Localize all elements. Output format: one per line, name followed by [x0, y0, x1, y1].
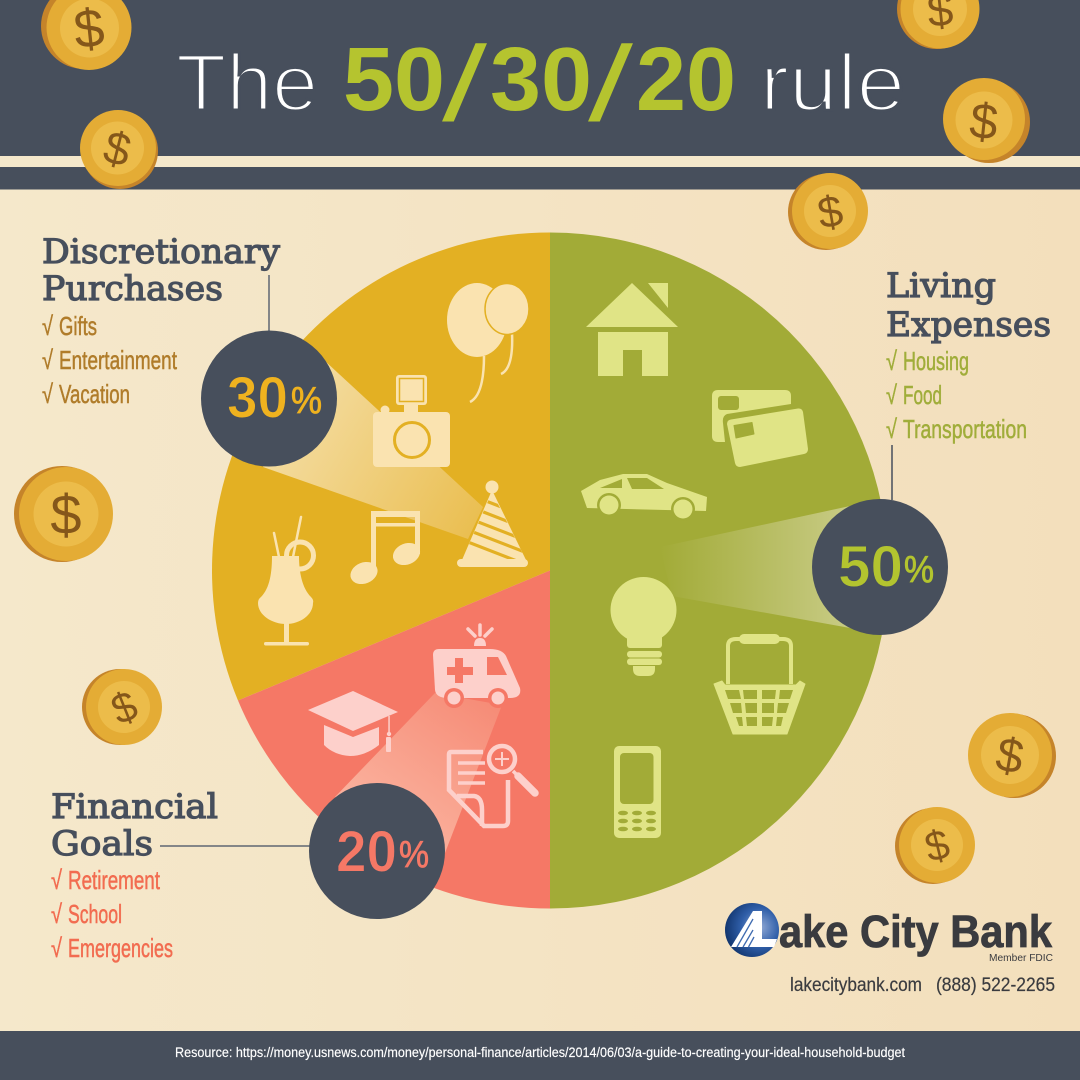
- callout: 20%: %: [399, 834, 429, 876]
- label: living expenses: Expenses: [886, 305, 1051, 345]
- label: financial goals: [51, 787, 218, 963]
- callout: 50%: 50: [838, 534, 903, 600]
- coin 8: $: [992, 728, 1027, 785]
- coin 4: $: [967, 92, 1001, 151]
- callout: 20%: [160, 783, 445, 919]
- label: living expenses: Transportation: [903, 414, 1027, 444]
- coin 8: [968, 713, 1056, 798]
- label: discretionary purchases: Purchases: [42, 269, 223, 309]
- icon: graduation cap: [308, 691, 398, 756]
- label: financial goals: Emergencies: [68, 933, 173, 963]
- coin 3: [897, 0, 980, 49]
- label: living expenses: [886, 266, 1051, 444]
- coin 7: $: [105, 681, 144, 734]
- icon: music notes: [347, 511, 423, 588]
- icon: ambulance: [433, 625, 520, 708]
- title: The: [176, 38, 318, 127]
- title: /: [587, 23, 634, 144]
- footer source text: Resource: https://money.usnews.com/money/personal-finance/articles/2014/06/03/a-guide-to-creating-your-ideal-household-budget: [175, 1045, 905, 1060]
- icon: credit cards: [712, 390, 808, 467]
- label: living expenses: √: [886, 346, 898, 376]
- icon: document with magnifier: [449, 746, 535, 826]
- footer bar: [0, 1031, 1080, 1080]
- coin 1: [41, 0, 132, 70]
- title: [176, 23, 905, 144]
- label: living expenses: Food: [903, 380, 942, 410]
- label: discretionary purchases: Vacation: [59, 379, 130, 409]
- label: discretionary purchases: √: [42, 345, 54, 375]
- coin 9: $: [920, 820, 954, 871]
- label: financial goals: √: [51, 899, 63, 929]
- coin 4: [943, 78, 1030, 163]
- title: 20: [636, 30, 736, 130]
- label: living expenses: Living: [886, 266, 996, 306]
- spotlight 20: [335, 693, 502, 853]
- title: /: [441, 23, 488, 144]
- label: financial goals: Goals: [51, 824, 153, 864]
- coin 6: [14, 466, 113, 562]
- icon: car: [581, 474, 707, 521]
- title: 30: [490, 30, 592, 130]
- callout: 50%: [812, 445, 948, 635]
- coin 2: $: [99, 120, 136, 177]
- title: 50: [343, 30, 445, 130]
- spotlight 30: [263, 361, 483, 539]
- bank logo: [725, 903, 1053, 964]
- header banner: [0, 0, 1080, 190]
- icon: mobile phone: [614, 746, 661, 838]
- callout: 30%: %: [291, 380, 322, 422]
- icon: balloons: [447, 283, 529, 402]
- coin 5: [788, 173, 868, 250]
- callout: 30%: [201, 275, 337, 466]
- icon: light bulb: [610, 577, 676, 676]
- label: discretionary purchases: Discretionary: [42, 232, 281, 272]
- label: financial goals: √: [51, 865, 63, 895]
- label: discretionary purchases: √: [42, 379, 54, 409]
- coin 6: $: [50, 483, 82, 546]
- spotlight 50: [660, 506, 850, 628]
- label: living expenses: √: [886, 380, 898, 410]
- label: financial goals: Retirement: [68, 865, 161, 895]
- label: financial goals: √: [51, 933, 63, 963]
- pie chart: [212, 232, 888, 908]
- coin 9: [895, 807, 975, 884]
- callout: 20%: 20: [336, 820, 397, 884]
- title: rule: [760, 38, 905, 127]
- bank logo: Member FDIC: [989, 953, 1053, 964]
- contact details: (888) 522-2265: [936, 975, 1055, 996]
- coin 2: [80, 110, 158, 189]
- label: living expenses: √: [886, 414, 898, 444]
- callout: 50%: %: [904, 549, 934, 591]
- contact details: lakecitybank.com: [790, 975, 922, 996]
- label: discretionary purchases: √: [42, 311, 54, 341]
- callout: 30%: 30: [227, 366, 288, 430]
- icon: camera: [373, 375, 450, 467]
- icon: shopping basket: [714, 634, 805, 734]
- icon: house: [586, 283, 678, 376]
- contact details: [790, 975, 1055, 996]
- coin 5: $: [814, 186, 847, 239]
- label: discretionary purchases: [42, 232, 281, 409]
- label: financial goals: Financial: [51, 787, 218, 827]
- label: discretionary purchases: Gifts: [59, 311, 97, 341]
- icon: cocktail: [258, 517, 314, 646]
- label: discretionary purchases: Entertainment: [59, 345, 178, 375]
- label: living expenses: Housing: [903, 346, 969, 376]
- coin 7: [82, 669, 162, 745]
- icon: party hat: [457, 480, 528, 567]
- bank logo: ake City Bank: [779, 906, 1053, 957]
- label: financial goals: School: [68, 899, 122, 929]
